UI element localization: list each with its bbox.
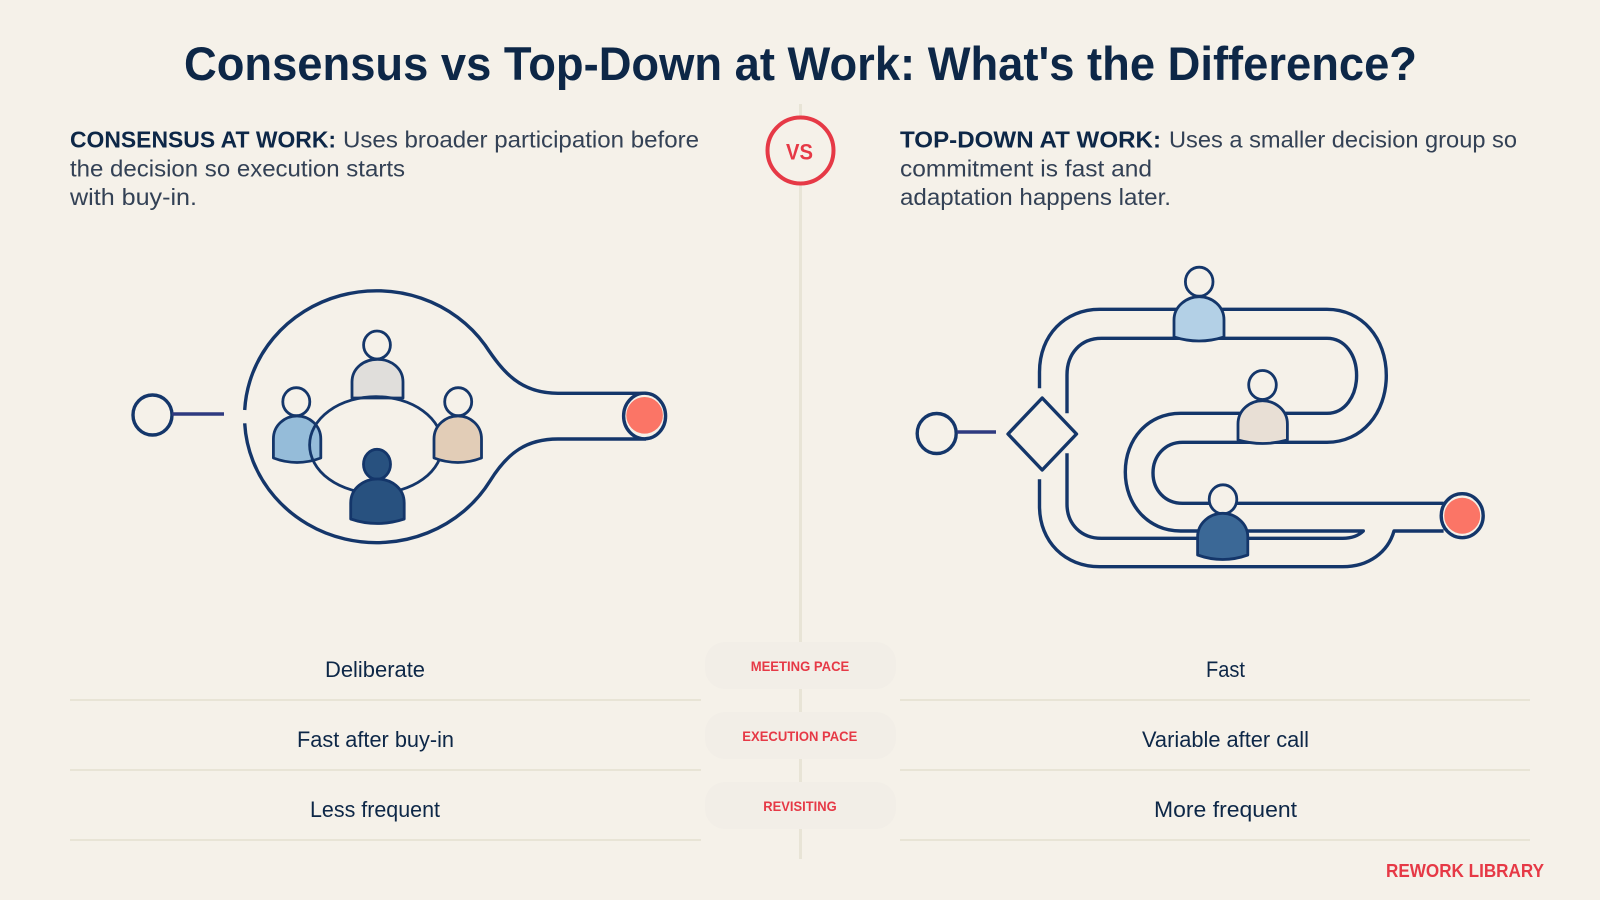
right description: adaptation happens later. [900,184,1171,210]
end node [624,393,666,439]
row: revisiting: REVISITING [763,798,837,814]
person: left [273,388,321,462]
left description [69,126,699,210]
row: execution pace: Fast after buy-in [297,727,454,752]
entry line [957,430,996,434]
row: meeting pace: Fast [1206,657,1245,682]
row: meeting pace: Deliberate [325,657,425,682]
row: execution pace: Variable after call [1142,727,1309,752]
person: top [1174,267,1224,341]
diagram: consensus process [133,291,666,543]
right description: TOP-DOWN AT WORK: [900,126,1161,152]
decision diamond [1008,398,1076,470]
path outlines [1040,309,1444,503]
left description: Uses broader participation before [343,126,699,152]
person: bottom [351,449,404,524]
right description: commitment is fast and [900,156,1152,182]
table [310,397,442,493]
row: execution pace: EXECUTION PACE [742,728,857,744]
row: execution pace [297,712,1309,759]
right description [900,126,1517,210]
left description: CONSENSUS AT WORK: [70,126,336,152]
funnel outline [245,291,646,543]
row: revisiting: Less frequent [310,797,440,822]
person: top [352,331,403,398]
row: revisiting: More frequent [1154,797,1297,822]
start node [133,395,172,435]
title: Consensus vs Top-Down at Work: What's the Difference? [184,37,1417,90]
VS badge: VS [786,140,813,164]
person: bottom [1198,485,1248,560]
diagram: top-down process [917,267,1483,567]
left description: the decision so execution starts [70,156,405,182]
row: revisiting [310,782,1297,829]
comparison table [70,642,1530,840]
row: meeting pace: MEETING PACE [751,658,849,674]
entry line [172,412,224,416]
person: middle [1238,370,1287,444]
right description: Uses a smaller decision group so [1169,126,1517,152]
row: meeting pace [325,642,1245,689]
brand label: REWORK LIBRARY [1386,861,1544,881]
left description: with buy-in. [69,184,197,210]
VS badge [768,118,834,184]
end node [1441,494,1483,538]
start node [917,414,956,454]
person: right [434,388,482,462]
